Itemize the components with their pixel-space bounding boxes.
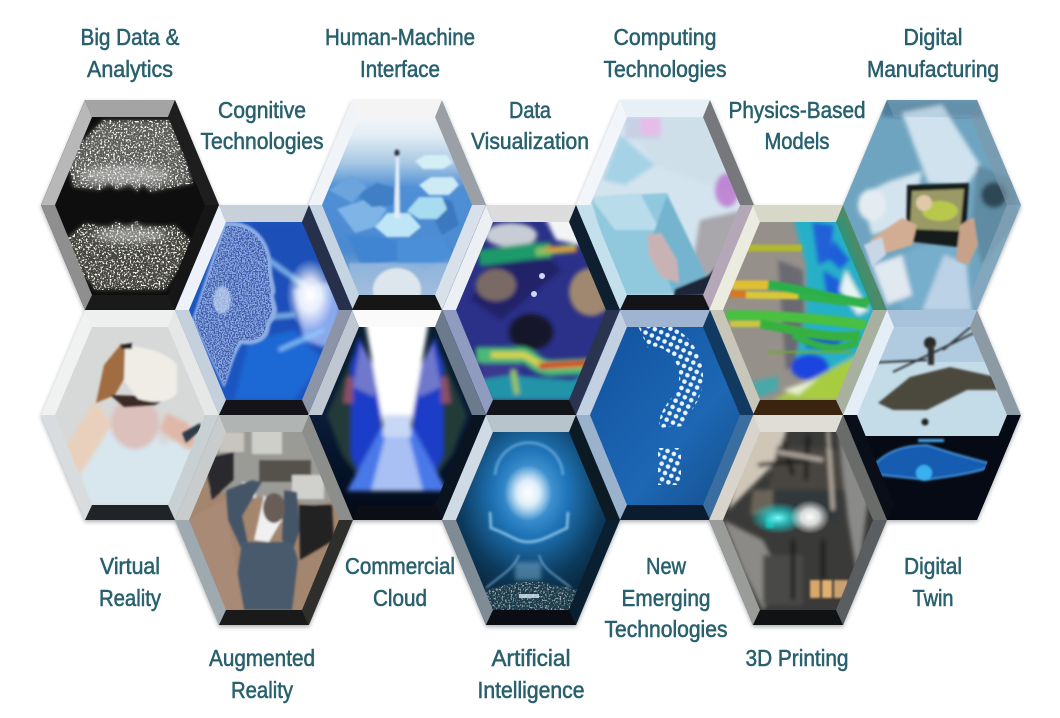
photo: glowing neural head [441, 414, 621, 626]
label: Computing Technologies: Technologies [604, 56, 726, 82]
question mark stem and dot [643, 335, 691, 485]
label: 3D Printing: 3D Printing [746, 645, 848, 671]
bevel frame [442, 415, 620, 625]
photo: man wearing a VR headset [55, 310, 219, 518]
bevel frame [576, 100, 754, 310]
label: New Emerging Technologies [604, 553, 728, 642]
bevel frame [41, 100, 219, 310]
hexagon: Big Data & Analytics [40, 99, 220, 311]
label: Digital Manufacturing [867, 24, 999, 82]
photo: dotted question mark on blue [575, 309, 755, 521]
hexagon: Virtual Reality [40, 309, 220, 521]
label: New Emerging Technologies: Emerging [622, 585, 710, 611]
photo: hands with a tablet beside a robot arm [842, 99, 1022, 311]
photo: attack helicopter and its digital twin [842, 309, 1022, 521]
bevel frame [175, 205, 353, 415]
label: Artificial Intelligence [478, 645, 584, 703]
bevel frame [175, 415, 353, 625]
label: Digital Manufacturing: Manufacturing [867, 56, 999, 82]
label: Human-Machine Interface: Interface [360, 56, 440, 82]
hexagon: New Emerging Technologies [575, 309, 755, 521]
label: Computing Technologies: Computing [614, 24, 716, 50]
label: Big Data & Analytics: Big Data & [80, 24, 180, 50]
label: Digital Twin: Digital [904, 553, 962, 579]
bevel frame [442, 205, 620, 415]
bevel frame [843, 310, 1021, 520]
hexagon: Digital Twin [842, 309, 1022, 521]
label: Data Visualization: Data [509, 97, 551, 123]
soft drop shadow beneath the honeycomb [41, 102, 1021, 627]
label: Virtual Reality: Reality [99, 585, 161, 611]
label: Physics-Based Models: Physics-Based [728, 97, 866, 123]
label: Cognitive Technologies: Cognitive [218, 97, 306, 123]
photo: CFD flow streamlines over an aircraft body [708, 204, 888, 416]
hexagon: Artificial Intelligence [441, 414, 621, 626]
hexagon: Commercial Cloud [307, 309, 487, 521]
hexagon: Human-Machine Interface [307, 99, 487, 312]
label: Commercial Cloud: Cloud [373, 585, 427, 611]
photo: technician working overhead on equipment [174, 414, 354, 626]
photo: mirrored white particle fans on black [40, 99, 220, 311]
hexagon: Physics-Based Models [708, 204, 888, 416]
hexagon: Data Visualization [441, 204, 621, 416]
photo: hand holding a tablet [577, 100, 740, 310]
label: Artificial Intelligence: Artificial [492, 645, 570, 671]
hexagon: Cognitive Technologies [174, 204, 354, 416]
photo: figure standing on glowing hex tiles [307, 99, 487, 312]
label: Commercial Cloud: Commercial [345, 553, 455, 579]
hexagon: Digital Manufacturing [842, 99, 1022, 311]
label: Digital Twin [904, 553, 962, 611]
label: Digital Twin: Twin [912, 585, 954, 611]
label: Physics-Based Models [728, 97, 866, 154]
hexagon: Computing Technologies [575, 99, 755, 311]
label: Cognitive Technologies [200, 97, 324, 154]
label: Human-Machine Interface: Human-Machine [325, 24, 475, 50]
bevel frame [709, 415, 887, 625]
bevel frame [709, 205, 887, 415]
bevel frame [308, 310, 486, 520]
label: Data Visualization: Visualization [471, 128, 589, 154]
label: Computing Technologies [604, 24, 726, 82]
label: New Emerging Technologies: Technologies [604, 616, 728, 642]
label: Cognitive Technologies: Technologies [200, 128, 324, 154]
bevel frame [576, 310, 754, 520]
hexagon: Augmented Reality [174, 414, 354, 626]
photo: data-centre aisle in blue light [307, 309, 487, 521]
label: Big Data & Analytics [80, 24, 180, 82]
label: New Emerging Technologies: New [646, 553, 686, 579]
label: Augmented Reality [209, 645, 315, 703]
bevel frame [308, 100, 486, 310]
label: Physics-Based Models: Models [764, 128, 830, 154]
label: Data Visualization [471, 97, 589, 154]
label: Big Data & Analytics: Analytics [87, 56, 173, 82]
photo: wireframe head with energy burst [174, 204, 354, 416]
label: Human-Machine Interface [325, 24, 475, 82]
label: Digital Manufacturing: Digital [904, 24, 962, 50]
label: Augmented Reality: Augmented [209, 645, 315, 671]
hexagon: 3D Printing [708, 414, 888, 626]
label: Virtual Reality: Virtual [100, 553, 160, 579]
photo: global climate heat-map [441, 204, 621, 416]
label: Virtual Reality [99, 553, 161, 611]
label: Commercial Cloud [345, 553, 455, 611]
photo: metal 3D printer chamber with cyan glow [708, 414, 888, 626]
bevel frame [41, 310, 219, 520]
label: Augmented Reality: Reality [231, 677, 293, 703]
label: Artificial Intelligence: Intelligence [478, 677, 584, 703]
bevel frame [887, 100, 1021, 310]
